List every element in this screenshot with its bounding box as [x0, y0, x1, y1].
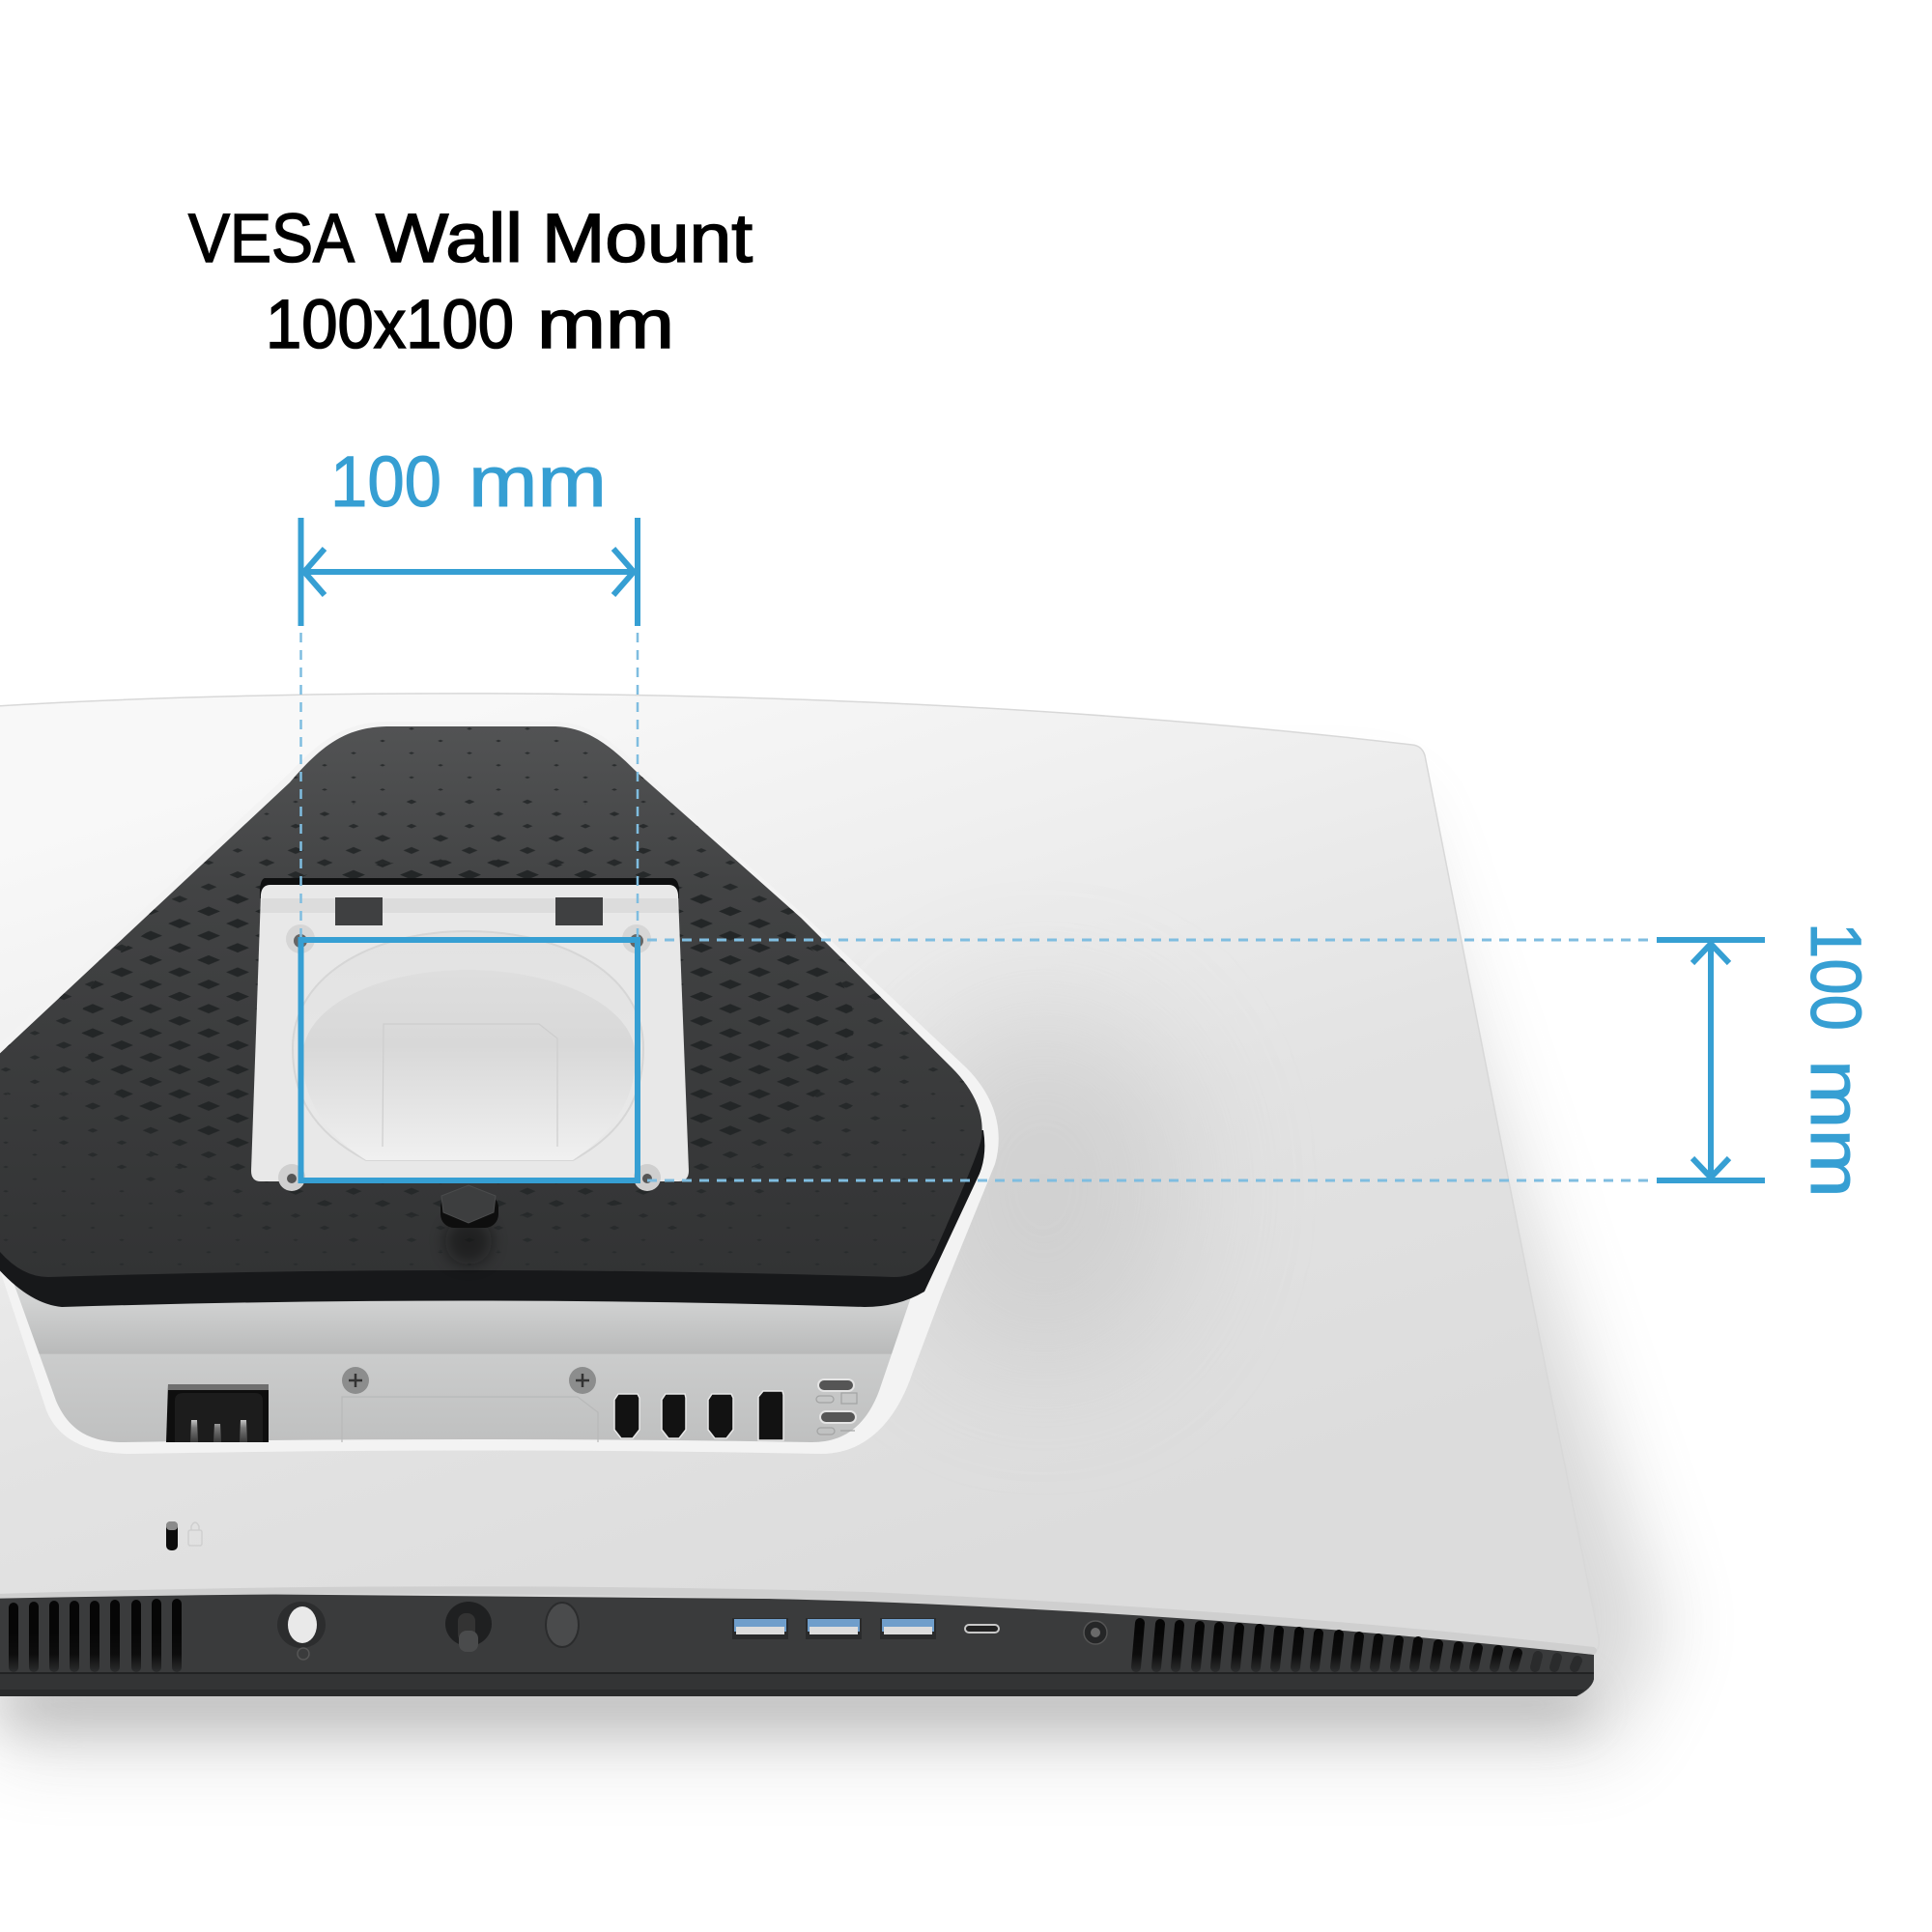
vertical dimension label: 100	[1796, 923, 1876, 1031]
HDMI port 2	[662, 1394, 686, 1438]
inner label outline	[383, 1024, 557, 1147]
monitor drop shadow	[0, 802, 1666, 1748]
power button	[277, 1602, 326, 1660]
inner dish	[302, 970, 636, 1160]
USB-C downstream port	[817, 1411, 856, 1435]
control button	[546, 1603, 579, 1647]
title line 1	[188, 201, 753, 277]
title line 1: Wall	[376, 201, 523, 277]
bay screw left	[342, 1367, 369, 1394]
horizontal dimension label: mm	[469, 441, 607, 522]
USB-A port 3	[880, 1618, 936, 1639]
security lock slot	[166, 1521, 202, 1550]
white rim around stand	[0, 722, 999, 1454]
joystick	[445, 1602, 492, 1652]
title line 1: Mount	[542, 201, 753, 277]
panel lip	[0, 1586, 1597, 1655]
title line 2	[266, 287, 674, 363]
audio jack	[1084, 1621, 1107, 1644]
VESA mount recess	[251, 885, 689, 1191]
DisplayPort	[758, 1391, 783, 1440]
horizontal dimension arrow	[301, 518, 638, 626]
title line 1: VESA	[188, 201, 355, 277]
ventilation diamond pattern	[0, 715, 1000, 1285]
title line 2: 100x100	[266, 287, 514, 363]
stand shadow on panel	[939, 1009, 1185, 1359]
HDMI port 1	[614, 1394, 639, 1438]
infographic canvas	[0, 211, 1862, 1777]
stand plate thick edge	[0, 1130, 984, 1307]
hex thumb screw	[440, 1185, 498, 1228]
horizontal guide lines	[647, 940, 1654, 1180]
vertical dimension arrow	[1657, 940, 1765, 1180]
mount recess shadow	[260, 878, 679, 898]
right vent slots	[1136, 1623, 1577, 1667]
recess plate	[251, 885, 689, 1181]
screw bottom right	[634, 1164, 661, 1191]
horizontal dimension label	[330, 441, 607, 522]
stand plate top surface	[0, 726, 982, 1277]
USB-A port 2	[806, 1618, 862, 1639]
screw top left	[286, 924, 315, 953]
power inlet	[166, 1384, 269, 1442]
horizontal dimension label: 100	[330, 441, 441, 522]
label plate outline	[342, 1397, 598, 1442]
knob shadow	[445, 1218, 492, 1264]
vertical dimension label	[1796, 923, 1876, 1198]
monitor rear panel	[0, 694, 1599, 1696]
clip slot left	[335, 897, 383, 925]
panel back surface	[0, 694, 1599, 1654]
bay screw right	[569, 1367, 596, 1394]
VESA 100x100 square	[301, 940, 638, 1180]
stand mount and port bay	[0, 715, 1000, 1454]
vertical dimension	[647, 923, 1876, 1198]
raised disc	[293, 931, 643, 1160]
clip slot right	[555, 897, 603, 925]
bottom dark edge strip	[0, 1592, 1594, 1696]
strip lower band	[0, 1673, 1594, 1696]
screw top right	[622, 924, 651, 953]
USB-A port 1	[732, 1618, 788, 1639]
recess top strip	[261, 898, 678, 913]
port bay interior	[0, 1256, 927, 1442]
title	[188, 201, 753, 363]
vertical dimension label: mm	[1796, 1060, 1876, 1198]
HDMI port 3	[708, 1394, 733, 1438]
left vent slots	[14, 1604, 177, 1667]
title line 2: mm	[537, 287, 674, 363]
USB-C upstream port	[816, 1379, 857, 1404]
screw bottom left	[278, 1164, 305, 1191]
horizontal dimension	[301, 441, 638, 939]
vertical guide lines	[301, 633, 638, 939]
USB-C port	[965, 1625, 999, 1633]
